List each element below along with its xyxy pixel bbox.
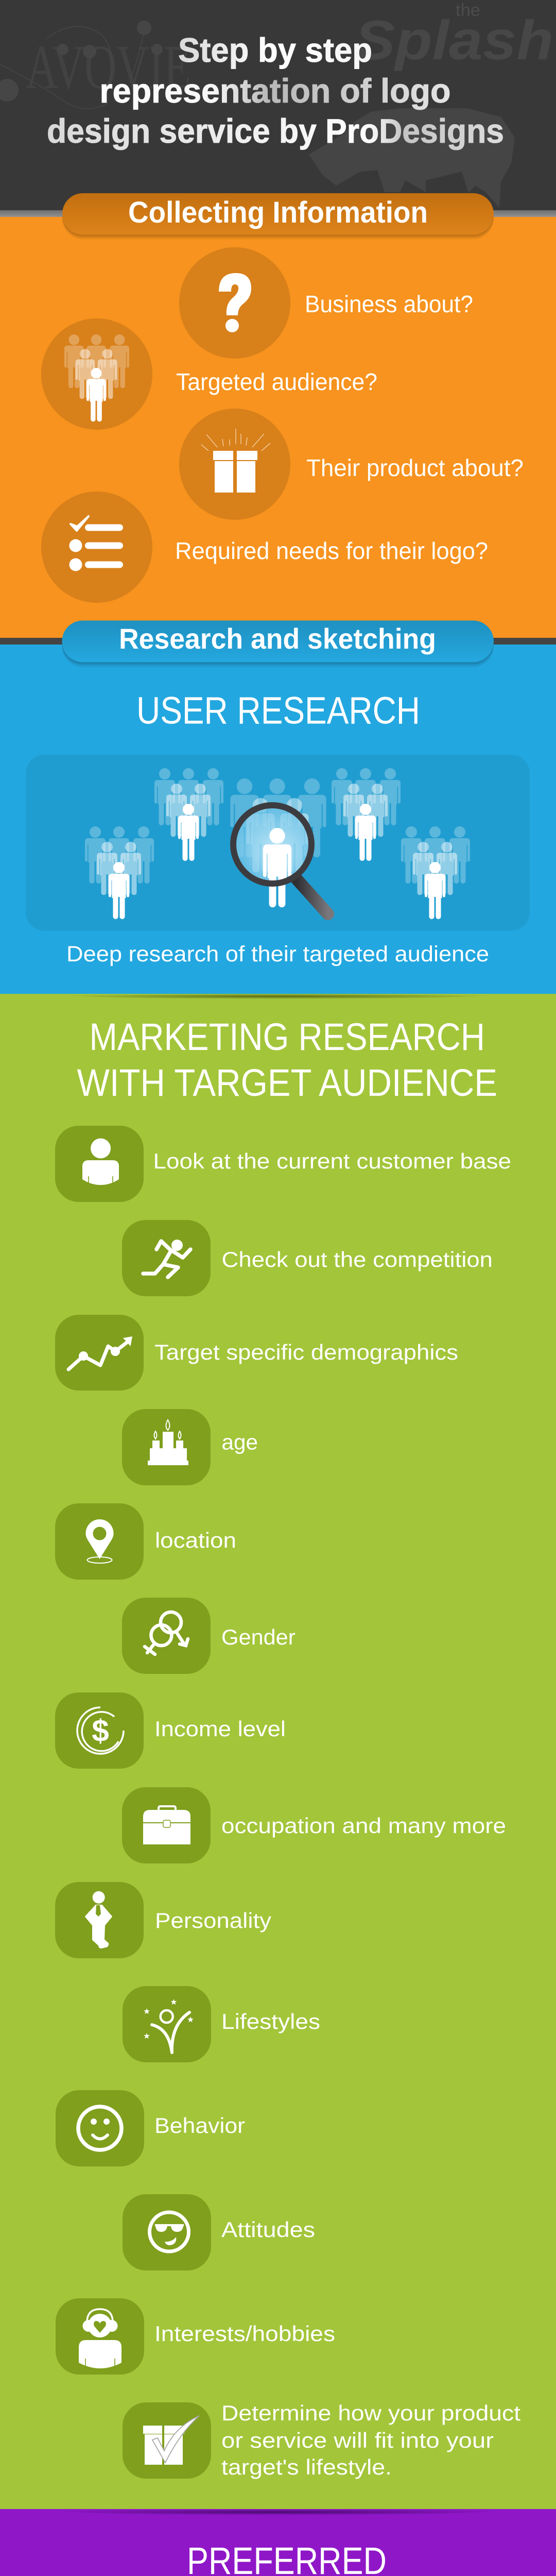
tile: personality man icon — [55, 1882, 144, 1958]
icon: gift box — [179, 409, 290, 520]
text: lifestyles: Lifestyles — [221, 2009, 320, 2033]
people group 1 — [85, 826, 154, 919]
tile: demographics chart icon — [55, 1315, 144, 1391]
heading: marketing research: WITH TARGET AUDIENCE — [77, 1061, 497, 1104]
text: location: location — [155, 1528, 236, 1552]
tile: customer base icon — [55, 1126, 144, 1202]
heading: marketing research: MARKETING RESEARCH — [90, 1015, 485, 1058]
heading: user research: USER RESEARCH — [136, 689, 420, 732]
text: personality: Personality — [155, 1908, 271, 1933]
tile: attitudes cool face icon — [123, 2194, 211, 2270]
panel: marketing research — [0, 994, 556, 2509]
text: product fit: target's lifestyle. — [221, 2455, 392, 2479]
heading: marketing research — [77, 1015, 497, 1104]
text: demographics: Target specific demographics — [154, 1340, 458, 1364]
tile: occupation briefcase icon — [122, 1787, 211, 1863]
heading pill: Collecting Information: Collecting Information — [128, 196, 428, 229]
people group 3 — [332, 768, 401, 861]
text: targeted audience: Targeted audience? — [176, 368, 377, 395]
icon: audience people — [41, 318, 152, 430]
tile: competition runner icon — [122, 1220, 211, 1296]
people group 2 — [154, 768, 223, 861]
tile: income dollar icon: $ — [92, 1714, 109, 1748]
watermark: rhino — [309, 108, 515, 208]
text: deep research: Deep research of their targeted audience — [66, 942, 489, 967]
heading pill: Collecting Information — [62, 193, 494, 239]
illustration: crowd under magnifier — [26, 755, 530, 930]
magnifier with person — [230, 778, 328, 914]
tile: gender symbols icon — [122, 1598, 211, 1674]
text: age: age — [221, 1430, 258, 1454]
text: product fit — [221, 2401, 520, 2479]
text: attitudes: Attitudes — [221, 2217, 315, 2242]
heading pill: Research and sketching — [62, 620, 494, 667]
icon: question mark — [179, 247, 290, 359]
icon: checklist — [41, 492, 152, 603]
text: business about: Business about? — [305, 291, 473, 317]
text: gender: Gender — [221, 1625, 296, 1649]
people group 4 — [401, 826, 470, 919]
text: competition: Check out the competition — [221, 1247, 493, 1272]
panel: collecting information — [0, 193, 556, 638]
tile: interests headphones icon — [56, 2298, 144, 2375]
title: representation of logo — [100, 72, 451, 110]
panel: preferred color palette — [0, 2509, 556, 2576]
tile: age cake icon — [122, 1409, 211, 1485]
watermark: Splash logo: Splash — [355, 9, 553, 71]
text: product fit: Determine how your product — [221, 2401, 520, 2425]
tile: lifestyles icon — [123, 1986, 211, 2062]
tile: income dollar icon — [55, 1692, 144, 1769]
text: behavior: Behavior — [154, 2113, 245, 2138]
panel: header — [0, 0, 556, 210]
title: Step by step — [178, 31, 372, 69]
watermark: Splash logo: the — [456, 1, 480, 20]
text: customer base: Look at the current customer base — [153, 1149, 511, 1173]
tile: behavior smiley icon — [56, 2090, 144, 2166]
text: product fit: or service will fit into your — [221, 2428, 494, 2452]
watermark: Avovie logo — [0, 21, 191, 109]
text: occupation: occupation and many more — [221, 1814, 506, 1838]
panel: research and sketching — [0, 620, 556, 994]
watermark: Avovie logo: AVOVIE — [26, 32, 191, 102]
text: interests: Interests/hobbies — [154, 2321, 335, 2346]
tile: product fit gift check icon — [123, 2402, 211, 2479]
text: required needs: Required needs for their logo? — [175, 537, 488, 564]
text: income level: Income level — [154, 1717, 286, 1741]
text: their product about: Their product about? — [306, 454, 524, 481]
title — [47, 31, 504, 150]
tile: location pin icon — [55, 1503, 144, 1580]
heading pill: Research and sketching: Research and sketching — [119, 622, 436, 655]
title: design service by ProDesigns — [47, 112, 504, 150]
